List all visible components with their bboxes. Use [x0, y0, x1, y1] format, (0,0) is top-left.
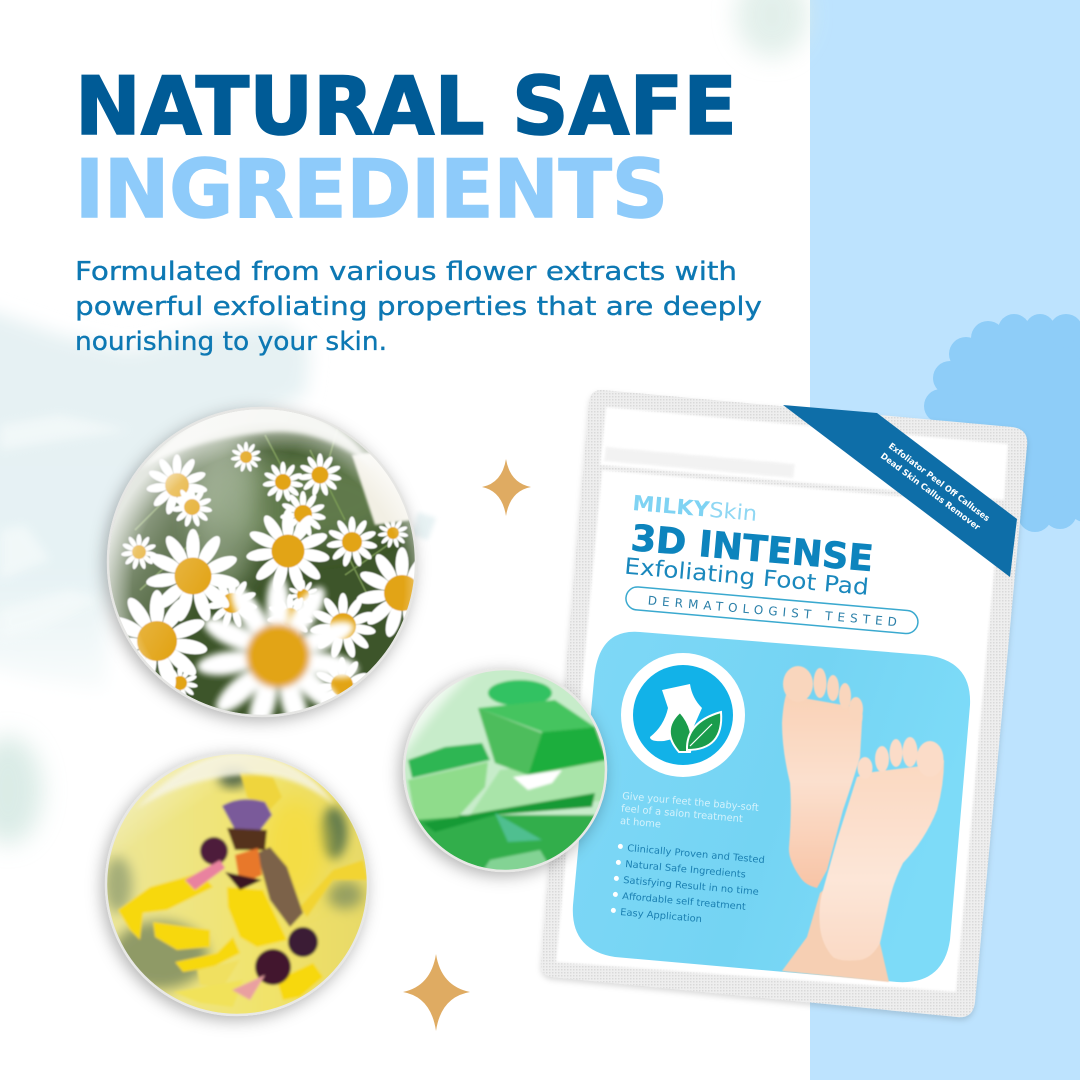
- product name: 3D INTENSE: [629, 518, 875, 580]
- feature list: Satisfying Result in no time: [623, 875, 759, 898]
- decorative watercolor wash: [0, 0, 808, 844]
- feature list: Affordable self treatment: [622, 891, 747, 913]
- gold sparkle star top: [482, 459, 531, 516]
- description text: Formulated from various flower extracts with: [75, 257, 737, 287]
- dermatologist tested pill: [625, 586, 919, 634]
- panel caption: Give your feet the baby-soft: [622, 791, 759, 814]
- feet photo: [782, 666, 944, 982]
- feature list: Clinically Proven and Tested: [627, 843, 765, 866]
- blue diagonal ribbon: Dead Skin Callus Remover: [878, 451, 982, 533]
- brand name: Skin: [708, 498, 758, 526]
- blue diagonal ribbon: Exfoliator Peel Off Calluses: [886, 441, 991, 524]
- gold sparkle star bottom: [403, 954, 470, 1031]
- feature list: [610, 842, 765, 925]
- foil pouch: [541, 390, 1027, 1017]
- dermatologist tested pill: DERMATOLOGIST TESTED: [647, 593, 897, 629]
- title: NATURAL SAFE: [75, 60, 737, 153]
- description text: nourishing to your skin.: [75, 327, 387, 357]
- blue diagonal ribbon: [783, 405, 1017, 577]
- title: [75, 60, 737, 236]
- panel caption: at home: [620, 816, 661, 830]
- blue scalloped flower shape: [924, 314, 1080, 532]
- ingredient photo: chamomile: [100, 400, 448, 737]
- description text: powerful exfoliating properties that are deeply: [75, 292, 762, 322]
- ingredient photo: witch hazel: [100, 745, 380, 1025]
- description text: [75, 257, 762, 357]
- title: INGREDIENTS: [75, 143, 668, 236]
- light blue panel: [573, 632, 970, 982]
- feature list: Easy Application: [620, 907, 702, 925]
- panel caption: [620, 791, 759, 839]
- foot icon: [621, 653, 745, 777]
- panel caption: feel of a salon treatment: [621, 803, 743, 825]
- product package: [541, 390, 1027, 1017]
- brand name: MILKY: [632, 491, 711, 522]
- brand name: [632, 491, 758, 526]
- feature list: Natural Safe Ingredients: [625, 859, 746, 881]
- ingredient photo: aloe vera: [400, 665, 610, 880]
- product name: Exfoliating Foot Pad: [623, 554, 870, 601]
